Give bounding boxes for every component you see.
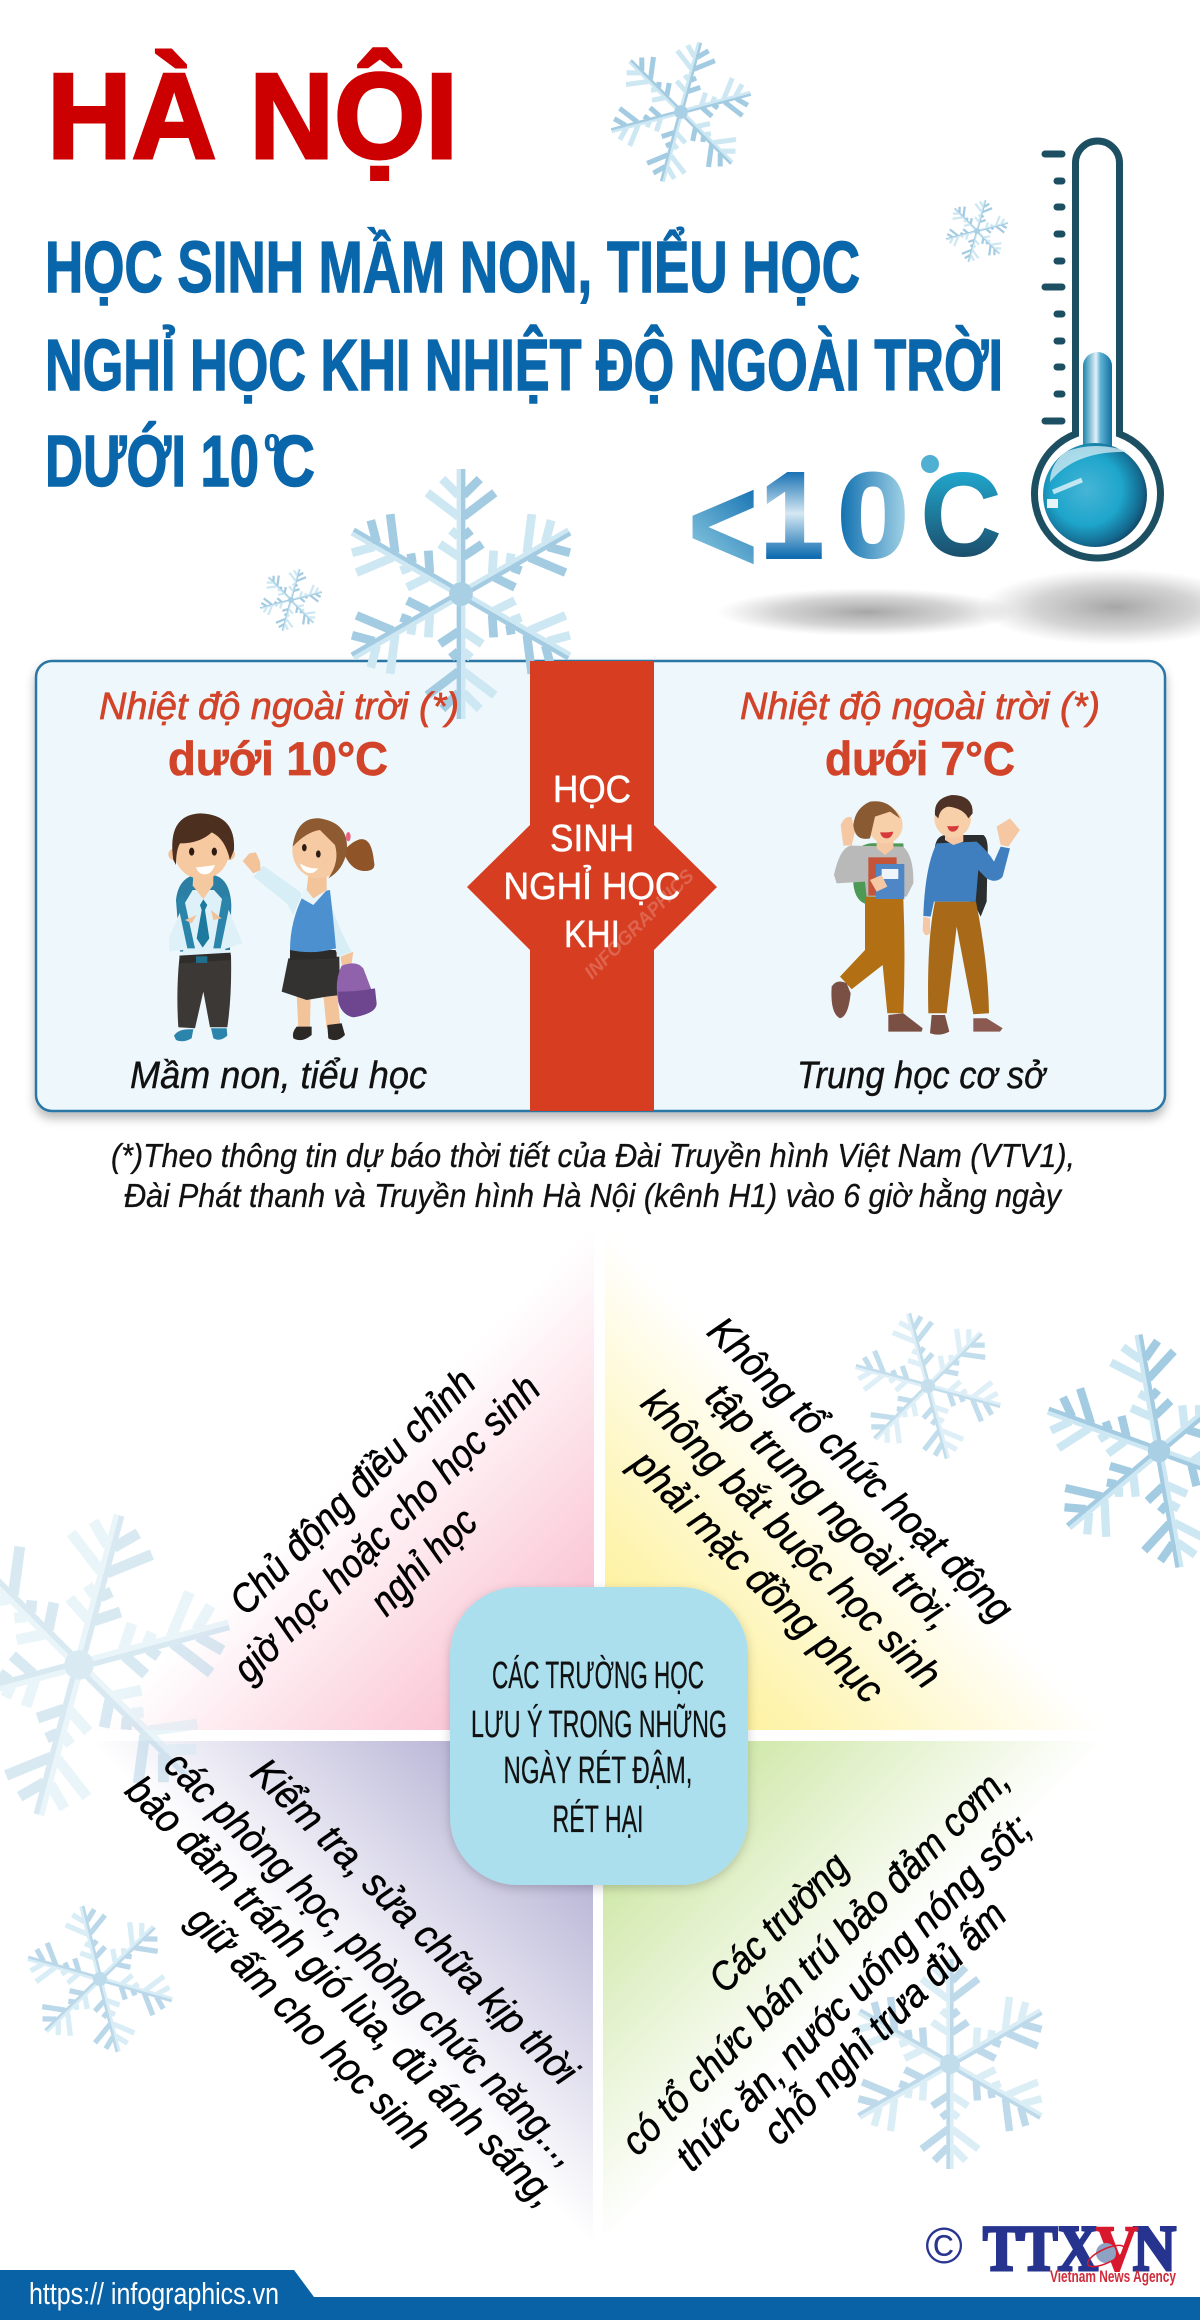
footer bar: https:// infographics.vn	[29, 2276, 279, 2311]
temperature label: under 10 degrees: C	[920, 448, 1002, 582]
snowflake: top	[593, 24, 769, 200]
subtitle	[45, 227, 1003, 502]
center callout: RÉT HẠI	[552, 1798, 644, 1841]
snowflake: small top right	[938, 192, 1016, 270]
temperature label: under 10 degrees	[689, 447, 1002, 598]
subtitle: C	[272, 422, 315, 502]
note: purple quadrant: các phòng học, phòng chức năng...,	[156, 1742, 589, 2175]
note: pink quadrant: giờ học hoặc cho học sinh	[225, 1367, 549, 1691]
illustration: secondary school students	[831, 795, 1020, 1035]
note: green quadrant: Các trường	[700, 1844, 857, 2001]
footer bar	[0, 2270, 1200, 2320]
logo: TTXVN: N	[1133, 2213, 1176, 2285]
center red band	[467, 661, 717, 1111]
temperature label: under 10 degrees: 1	[761, 447, 823, 583]
band text	[504, 769, 680, 956]
left heading: dưới 10°C	[168, 732, 388, 785]
note: purple quadrant: giữ ấm cho học sinh	[179, 1897, 440, 2158]
snowflake: far right	[1022, 1314, 1200, 1588]
left heading	[99, 686, 459, 785]
subtitle: HỌC SINH MẦM NON, TIỂU HỌC	[45, 227, 860, 308]
center callout: NGÀY RÉT ĐẬM,	[504, 1749, 692, 1792]
caption right: Trung học cơ sở	[797, 1055, 1048, 1097]
center callout: LƯU Ý TRONG NHỮNG	[471, 1702, 727, 1746]
note: purple quadrant: Kiểm tra, sửa chữa kịp thời	[242, 1750, 587, 2094]
footnote: (*)Theo thông tin dự báo thời tiết của Đài Truyền hình Việt Nam (VTV1),	[111, 1137, 1075, 1174]
center callout	[450, 1587, 748, 1885]
band text: KHI	[564, 914, 620, 956]
note: yellow quadrant	[621, 1309, 1021, 1712]
watermark: INFOGRAPHICS	[581, 865, 699, 984]
note: green quadrant: thức ăn, nước uống nóng sốt;	[667, 1806, 1040, 2179]
subtitle: 0	[264, 430, 280, 457]
footnote: Đài Phát thanh và Truyền hình Hà Nội (kênh H1) vào 6 giờ hằng ngày	[124, 1177, 1063, 1214]
snowflake: right middle	[836, 1294, 1020, 1478]
thermometer	[1034, 141, 1161, 558]
logo: TTXVN: V	[1096, 2213, 1138, 2285]
illustration: kindergarten and primary pupils	[168, 813, 377, 1041]
note: pink quadrant: nghỉ học	[362, 1500, 486, 1624]
title: HÀ NỘI	[47, 48, 458, 184]
note: pink quadrant: Chủ động điều chỉnh	[221, 1360, 484, 1623]
subtitle: DƯỚI 10	[45, 421, 259, 502]
logo: TTXVN: ©	[925, 2217, 963, 2274]
left heading: Nhiệt độ ngoài trời (*)	[99, 686, 459, 728]
logo: TTXVN: TTX	[983, 2213, 1098, 2285]
note: yellow quadrant: không bắt buộc học sinh	[633, 1380, 950, 1697]
logo: TTXVN	[925, 2213, 1176, 2286]
panel background	[36, 661, 1165, 1111]
right heading: Nhiệt độ ngoài trời (*)	[740, 686, 1100, 728]
note: green quadrant: chỗ nghỉ trưa đủ ấm	[754, 1892, 1015, 2153]
snowflake: right lower	[845, 1959, 1055, 2169]
right heading	[740, 686, 1100, 785]
note: purple quadrant: bảo đảm tránh gió lùa, đủ ánh sáng,	[117, 1768, 565, 2216]
center callout: CÁC TRƯỜNG HỌC	[492, 1654, 704, 1697]
snowflake: left large	[0, 1475, 269, 1855]
footnote	[111, 1137, 1075, 1214]
band text: NGHỈ HỌC	[504, 864, 680, 908]
snowflake: small left	[252, 561, 330, 639]
panel: school closing thresholds	[36, 469, 1165, 1111]
snowflake: large over panel	[336, 469, 586, 719]
note: yellow quadrant: tập trung ngoài trời,	[697, 1375, 961, 1639]
quadrant backgrounds	[0, 1216, 1200, 2261]
temperature label: under 10 degrees: <	[689, 452, 757, 598]
shadows under thermometer	[717, 569, 1200, 645]
band text: HỌC	[553, 769, 631, 811]
caption left: Mầm non, tiểu học	[130, 1055, 427, 1097]
note: yellow quadrant: phải mặc đồng phục	[621, 1441, 892, 1712]
note: yellow quadrant: Không tổ chức hoạt động	[699, 1309, 1021, 1631]
temperature label: under 10 degrees: 0	[837, 447, 909, 583]
band text: SINH	[550, 818, 634, 860]
note: green quadrant: có tổ chức bán trú bảo đảm cơm,	[613, 1758, 1019, 2164]
right heading: dưới 7°C	[825, 732, 1015, 785]
snowflake: left lower	[9, 1888, 191, 2070]
